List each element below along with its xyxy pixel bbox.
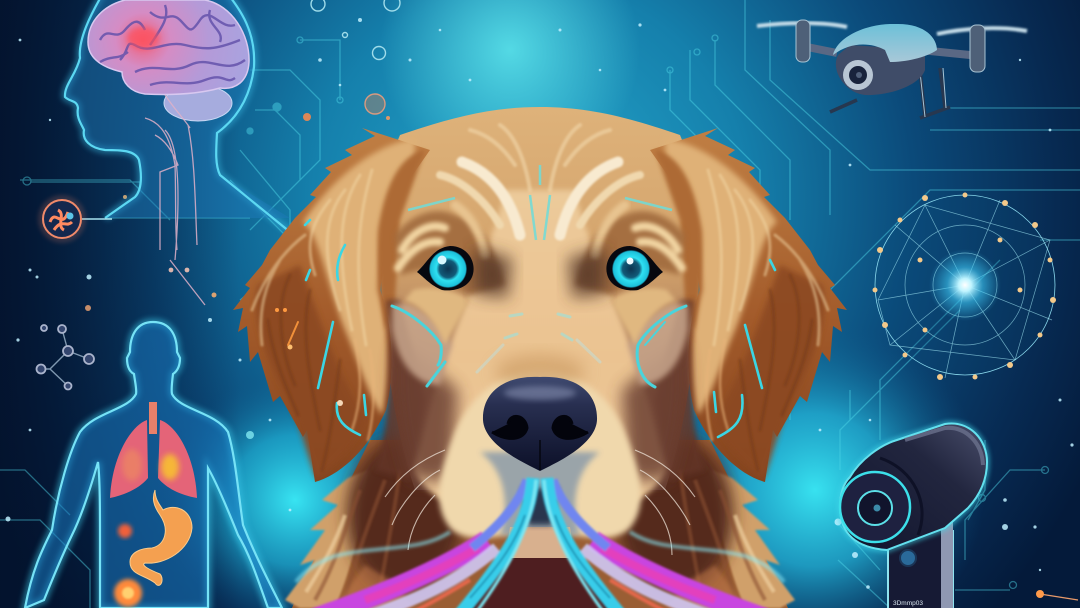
brow accents <box>408 165 672 240</box>
lens <box>840 472 910 542</box>
network sphere <box>872 192 1056 380</box>
right ear <box>650 128 847 482</box>
head profile with brain <box>65 0 290 305</box>
head glow <box>65 0 290 232</box>
right eye <box>606 246 663 290</box>
lungs <box>110 420 197 498</box>
cerebellum <box>164 85 232 121</box>
face circuit markings <box>392 306 686 387</box>
brain <box>88 0 249 94</box>
icon: molecule <box>36 325 94 390</box>
muzzle shadow <box>480 452 600 535</box>
dog neck fur <box>285 437 795 608</box>
icon: orange molecule circle <box>38 195 112 243</box>
nose <box>483 377 597 471</box>
scent streams <box>296 478 784 608</box>
drone <box>757 20 1027 118</box>
chin <box>505 527 575 560</box>
head outline <box>65 0 290 232</box>
capsule glow <box>840 423 987 550</box>
left ear <box>233 128 430 482</box>
orange node <box>1036 590 1078 600</box>
glowing body <box>25 322 282 608</box>
glowing orb <box>114 579 142 607</box>
device label: 3Dmmp03 <box>893 600 923 607</box>
head <box>381 107 699 490</box>
left eye <box>417 246 474 290</box>
camera device <box>840 423 987 608</box>
brain stem and nerves <box>145 95 205 305</box>
capsule body <box>840 423 987 550</box>
ear circuit marks <box>275 220 775 437</box>
floating bubbles near top <box>311 0 400 114</box>
stomach <box>130 490 192 585</box>
dog <box>233 107 847 608</box>
whiskers <box>385 450 695 555</box>
right face details <box>550 125 688 480</box>
head silhouette <box>65 0 290 218</box>
trachea <box>149 402 157 434</box>
body glow <box>25 322 282 608</box>
left face details <box>392 125 530 480</box>
face and muzzle blaze <box>415 190 665 522</box>
human body with lungs and stomach <box>25 322 282 608</box>
handle <box>887 520 954 608</box>
muzzle <box>439 370 641 538</box>
